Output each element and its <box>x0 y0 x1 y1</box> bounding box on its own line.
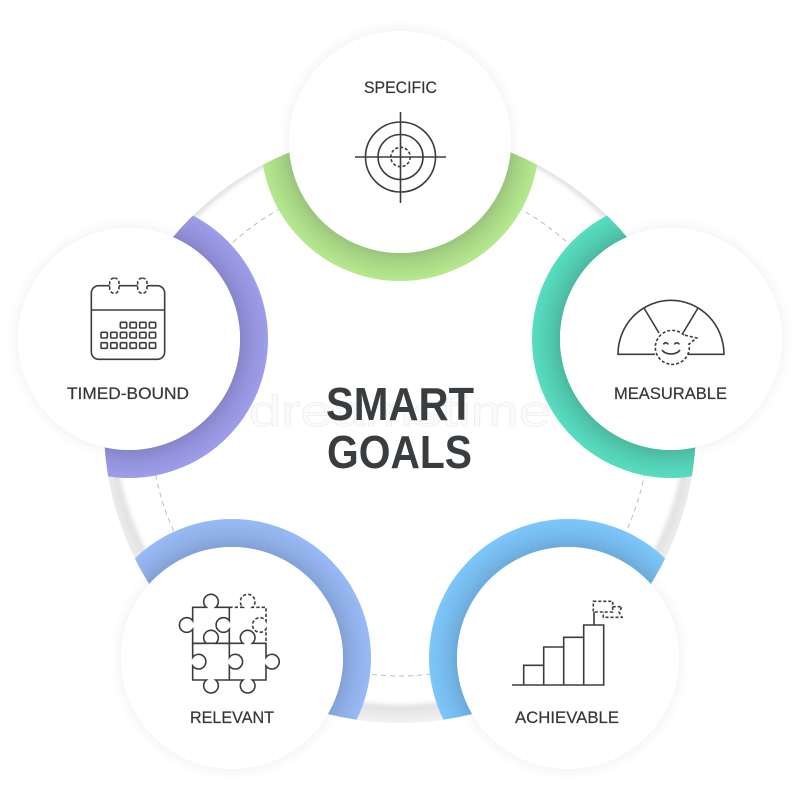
label: TIMED-BOUND <box>67 385 189 403</box>
watermark: dreamstime <box>249 387 551 436</box>
panel: specific <box>263 30 537 281</box>
title: SMART GOALS: GOALS <box>327 426 472 478</box>
blue ring <box>429 519 665 720</box>
icon: calendar <box>91 278 165 359</box>
teal ring <box>532 216 696 478</box>
white circle <box>289 31 511 253</box>
icon: puzzle <box>179 594 279 693</box>
white circle <box>121 547 343 769</box>
icon: gauge with smiley <box>618 300 724 364</box>
purple ring <box>104 216 268 478</box>
title: SMART GOALS <box>326 378 474 478</box>
white circle <box>18 228 240 450</box>
white circle <box>560 228 782 450</box>
dashed connector circle <box>151 178 649 676</box>
panel: achievable <box>429 519 680 770</box>
title: SMART GOALS: SMART <box>326 378 474 430</box>
panel: timed-bound <box>18 216 268 478</box>
label: RELEVANT <box>190 709 274 727</box>
green ring <box>263 152 537 281</box>
grey base ring <box>104 131 696 723</box>
panel: relevant <box>120 519 371 770</box>
label: ACHIEVABLE <box>515 709 619 727</box>
label: MEASURABLE <box>614 385 727 403</box>
label: SPECIFIC <box>364 79 437 97</box>
panel: measurable <box>532 216 782 478</box>
white circle <box>457 547 679 769</box>
periwinkle ring <box>135 519 371 720</box>
icon: stairs with flag <box>512 601 622 685</box>
icon: target <box>355 112 446 203</box>
